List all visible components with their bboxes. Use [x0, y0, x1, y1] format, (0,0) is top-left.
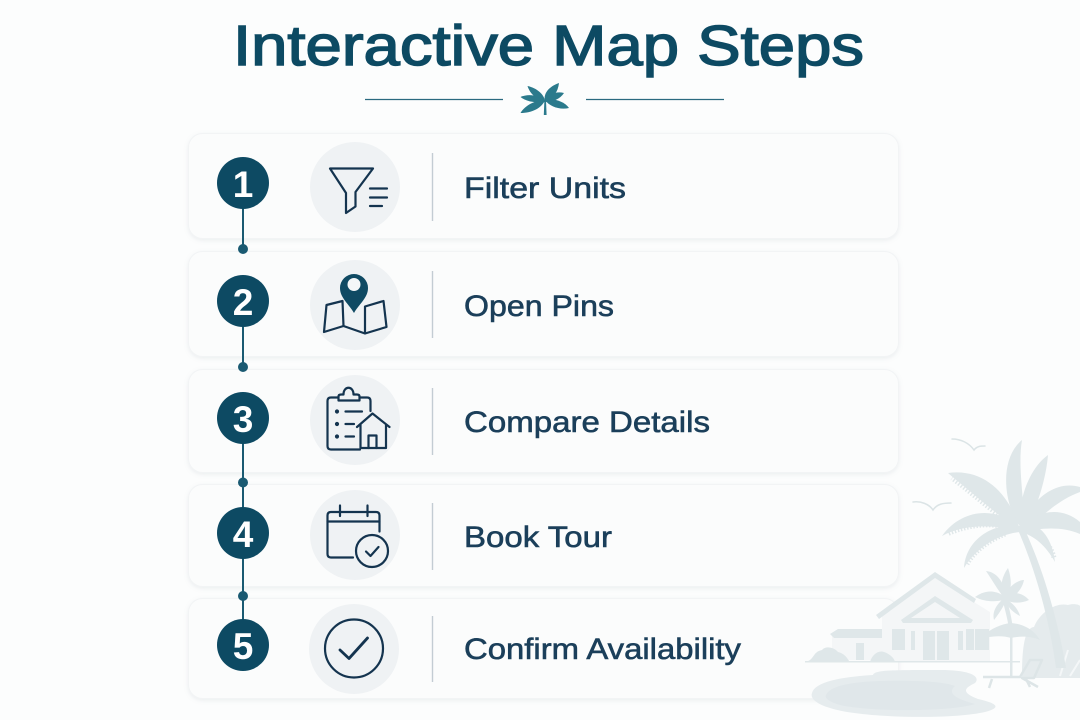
label: Filter Units: Filter Units [464, 172, 626, 205]
birds [913, 439, 985, 510]
panel: step 3 Compare Details [188, 370, 898, 472]
number badge 4: 4 [233, 514, 254, 555]
icon: clipboard with house [328, 388, 390, 450]
panel: step 2 Open Pins [188, 252, 898, 356]
label: Compare Details: Compare Details [464, 406, 710, 439]
number badge 4 [217, 507, 269, 559]
number badge 3: 3 [233, 399, 253, 440]
timeline connector [238, 205, 248, 622]
title ornament: divider with palm [365, 83, 724, 115]
decorative scene: palm trees, house and pool [805, 439, 1080, 717]
label: Confirm Availability: Confirm Availability [464, 633, 741, 666]
number badge 2 [217, 275, 269, 327]
number badge 1: 1 [233, 164, 253, 205]
number badge 2: 2 [233, 282, 253, 323]
number badge 5: 5 [233, 626, 253, 667]
label: Book Tour: Book Tour [464, 521, 612, 554]
panel: step 5 Confirm Availability [188, 598, 898, 698]
icon: funnel with list lines [330, 168, 387, 213]
panel: step 1 Filter Units [188, 134, 898, 238]
panel: step 4 Book Tour [188, 484, 898, 586]
icon: calendar with check badge [328, 506, 388, 567]
bushes right [1022, 604, 1080, 678]
number badge 1 [217, 157, 269, 209]
icon: map with pin [324, 274, 386, 334]
small palm tree [975, 568, 1029, 630]
umbrella and lounger [980, 623, 1042, 688]
icon: check in circle [325, 620, 383, 678]
number badge 5 [217, 619, 269, 671]
large palm tree [942, 440, 1080, 668]
pool [812, 670, 995, 717]
label: Open Pins: Open Pins [464, 290, 614, 323]
title: Interactive Map Steps [233, 14, 864, 78]
house [805, 572, 1020, 662]
number badge 3 [217, 392, 269, 444]
